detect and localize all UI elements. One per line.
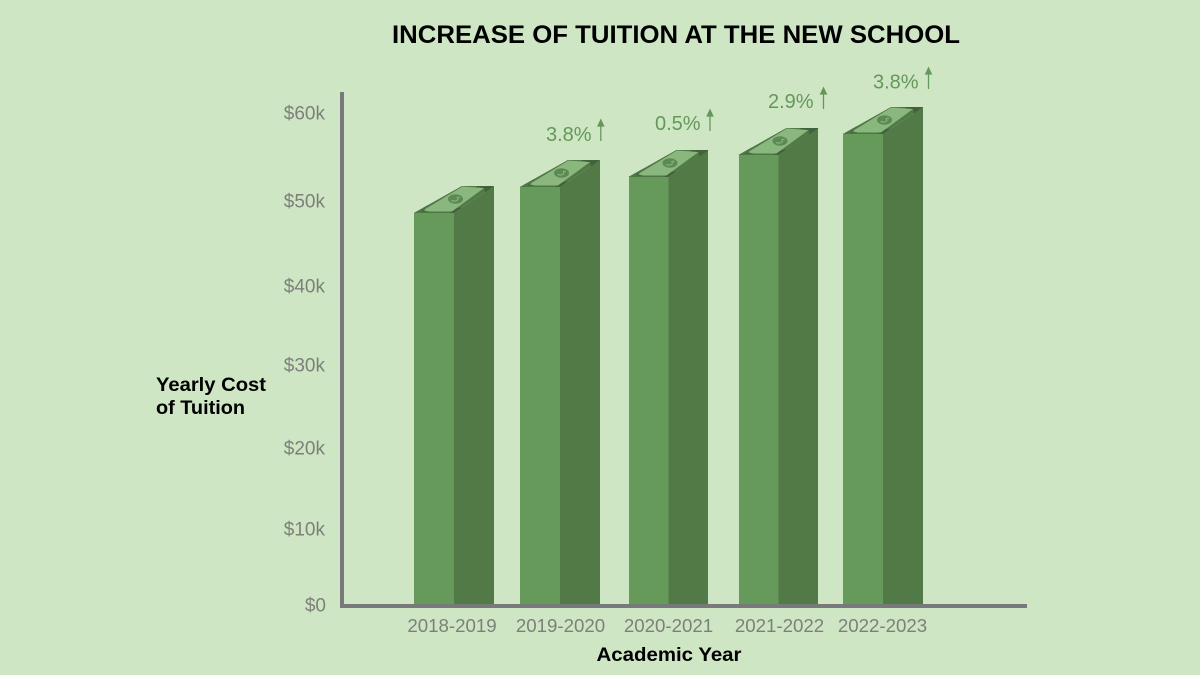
increase label 2021-2022 [768, 88, 826, 113]
y axis tick labels: $50k [284, 192, 325, 212]
y axis tick labels [284, 104, 326, 616]
x axis tick labels: 2021-2022 [735, 615, 824, 636]
bar 2018-2019 [414, 186, 494, 605]
y axis tick labels: $30k [284, 356, 325, 376]
y axis tick labels: $20k [284, 438, 325, 460]
bar 2020-2021 [628, 150, 708, 605]
bar 2022-2023 [843, 107, 923, 605]
increase label 2019-2020: 3.8% [546, 124, 592, 146]
x axis tick labels: 2022-2023 [838, 615, 927, 636]
y axis tick labels: $0 [305, 596, 326, 616]
x axis tick labels: 2019-2020 [516, 615, 605, 636]
increase label 2022-2023: 3.8% [873, 72, 919, 94]
x axis tick labels: 2020-2021 [624, 615, 713, 636]
x axis tick labels: 2018-2019 [407, 615, 497, 636]
axes [340, 92, 1027, 608]
increase label 2019-2020 [546, 120, 604, 146]
y axis tick labels: $40k [284, 276, 325, 298]
increase label 2020-2021: 0.5% [655, 113, 701, 135]
x axis tick labels [407, 615, 927, 636]
title: INCREASE OF TUITION AT THE NEW SCHOOL [392, 21, 960, 49]
increase label 2021-2022: 2.9% [768, 91, 814, 113]
y axis tick labels: $60k [284, 104, 325, 124]
y axis tick labels: $10k [284, 520, 325, 540]
bar 2021-2022 [738, 128, 818, 605]
increase label 2022-2023 [873, 68, 931, 94]
y axis title: Yearly Cost [156, 375, 267, 396]
increase label 2020-2021 [655, 110, 713, 135]
y axis title: of Tuition [156, 398, 245, 419]
bar 2019-2020 [520, 160, 600, 605]
x axis title: Academic Year [596, 645, 742, 666]
